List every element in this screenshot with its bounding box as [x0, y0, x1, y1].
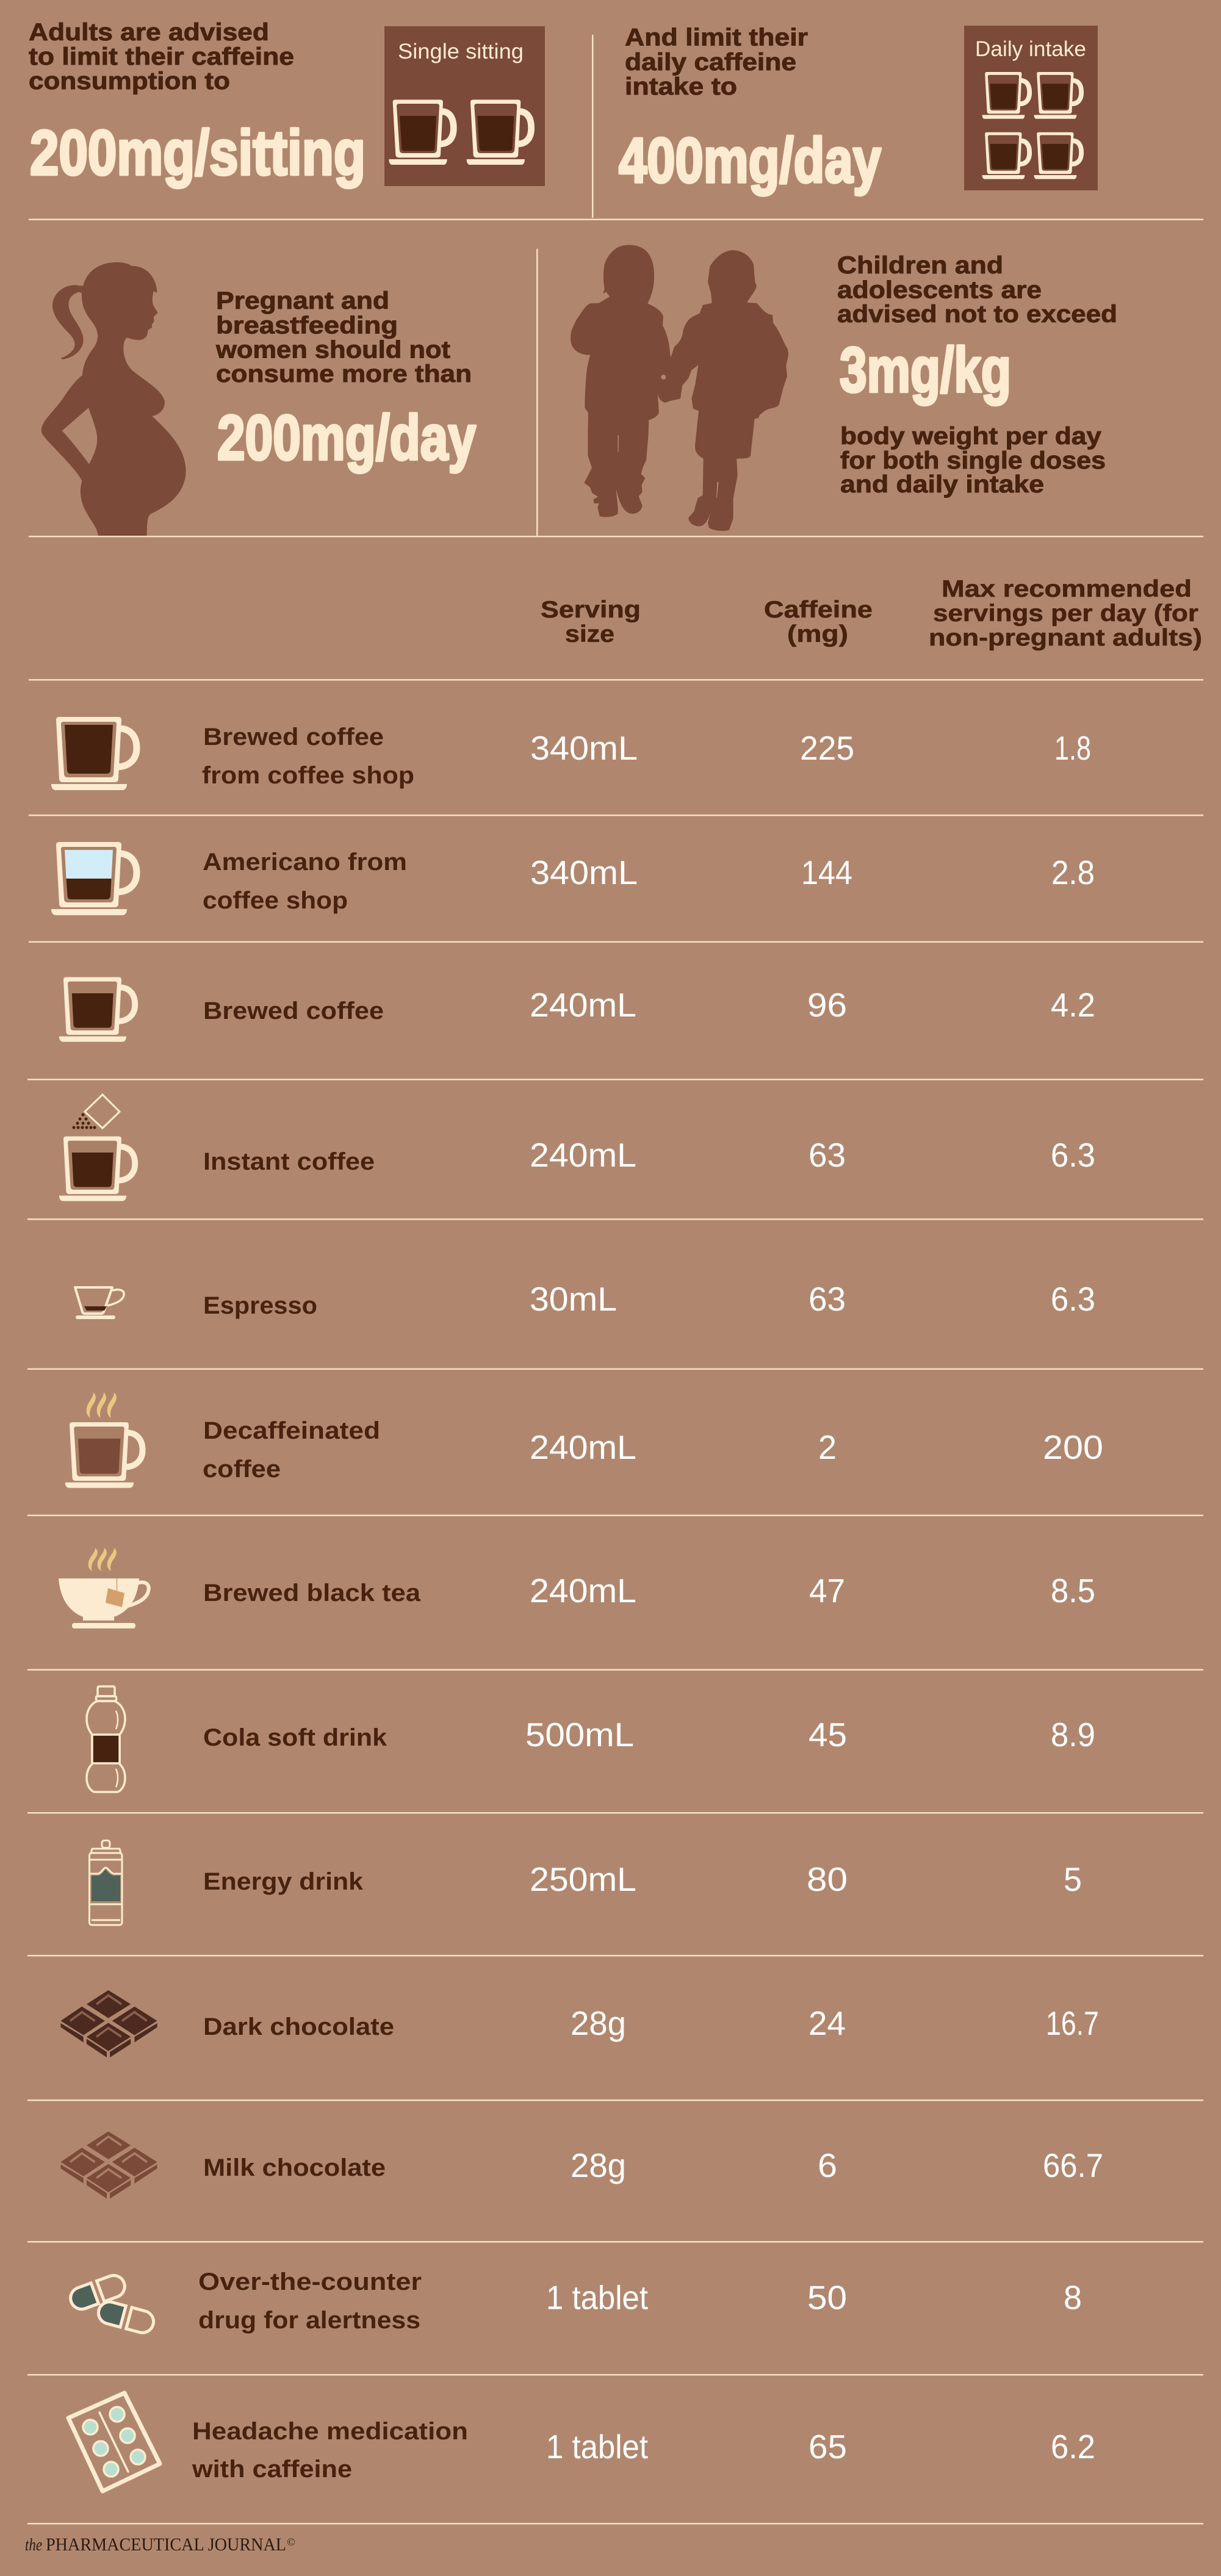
values: 24 [809, 2004, 846, 2042]
divider: horizontal [29, 218, 1203, 220]
label: Over-the-counter [198, 2268, 422, 2295]
icon: decaf mug with steam [65, 1392, 143, 1488]
column heading: max recommended servings: servings per day (for [933, 600, 1198, 627]
label: coffee shop [203, 887, 348, 914]
values [571, 2004, 1099, 2042]
values: 240mL [530, 1428, 636, 1466]
values [525, 1716, 1095, 1754]
text: children advice: Children and [837, 252, 1003, 279]
values: 63 [809, 1280, 846, 1318]
text: daily advice: And limit their [625, 24, 808, 51]
label: Brewed black tea [203, 1580, 421, 1606]
label: Espresso [203, 1292, 317, 1319]
text: daily advice [625, 24, 808, 100]
values: 5 [1064, 1860, 1082, 1898]
label: Energy drink [203, 1868, 364, 1895]
icon: blister pack [68, 2393, 160, 2491]
values [546, 2278, 1082, 2316]
icon: children silhouette [571, 245, 788, 531]
values [530, 854, 1095, 891]
icon: americano mug [51, 842, 137, 915]
label: Brewed coffee [203, 998, 384, 1024]
text: pregnancy advice: breastfeeding [216, 312, 398, 339]
values: 2.8 [1051, 854, 1095, 891]
text: children advice: adolescents are [837, 277, 1042, 304]
text: pregnancy advice [215, 287, 472, 387]
table rules [27, 536, 1203, 2525]
column heading: caffeine: (mg) [787, 621, 848, 647]
values: 66.7 [1043, 2146, 1103, 2184]
text: pregnancy advice: consume more than [216, 361, 472, 387]
values [546, 2428, 1095, 2466]
values: 1.8 [1054, 729, 1091, 767]
label: coffee [203, 1456, 281, 1483]
label: from coffee shop [202, 762, 414, 789]
label: Brewed coffee [203, 724, 384, 750]
values [530, 986, 1095, 1024]
icon: tea cup with tea bag [59, 1548, 149, 1628]
values [571, 2146, 1103, 2184]
values: 250mL [530, 1860, 636, 1898]
values: 4.2 [1051, 986, 1095, 1024]
values: 1 tablet [546, 2278, 648, 2316]
row: brewed coffee [59, 977, 1095, 1042]
text: pregnancy advice: women should not [215, 337, 450, 364]
box: daily intake [964, 26, 1098, 190]
values: 225 [800, 729, 854, 767]
icon: mug two [467, 99, 531, 165]
label: drug for alertness [198, 2307, 420, 2334]
row: brewed coffee from coffee shop [51, 717, 1091, 790]
row: over-the-counter drug [68, 2268, 1082, 2335]
values: 47 [809, 1572, 845, 1610]
values: 45 [809, 1716, 847, 1754]
big number: 3mg/kg: 3mg/kg [840, 335, 1011, 406]
label: Cola soft drink [203, 1724, 387, 1751]
row: dark chocolate [60, 1990, 1099, 2057]
values: 8 [1064, 2278, 1082, 2316]
values: 28g [571, 2146, 626, 2184]
values: 6 [818, 2146, 837, 2184]
icon: coffee mug [51, 717, 137, 790]
text: body weight note [840, 423, 1106, 498]
big number: 200mg/sitting: 200mg/sitting [30, 118, 366, 189]
row: energy drink [89, 1840, 1082, 1925]
icon: instant coffee mug with sachet [59, 1095, 135, 1201]
label: Instant coffee [203, 1148, 375, 1175]
values: 240mL [530, 986, 636, 1024]
text: adults advice: to limit their caffeine [29, 43, 294, 70]
big number: 400mg/day: 400mg/day [619, 126, 881, 196]
values: 30mL [530, 1280, 617, 1318]
column heading: max recommended servings [929, 576, 1202, 651]
values: 144 [801, 854, 852, 891]
column heading: caffeine [764, 597, 873, 647]
text: adults advice [29, 19, 294, 95]
big number: 200mg/day: 200mg/day [217, 403, 476, 473]
text: body weight note: body weight per day [840, 423, 1102, 450]
values: 240mL [530, 1136, 636, 1174]
values [530, 1280, 1095, 1318]
label [203, 1417, 380, 1483]
label: Dark chocolate [203, 2013, 394, 2040]
icon: mug grid [982, 72, 1081, 179]
column heading: max recommended servings: Max recommended [942, 576, 1192, 602]
values: 96 [807, 986, 847, 1024]
values [530, 729, 1091, 767]
values: 2 [818, 1428, 837, 1466]
panel: children [571, 245, 1117, 531]
footer: publisher logo: © [287, 2536, 295, 2548]
values: 80 [807, 1860, 848, 1898]
values: 63 [809, 1136, 846, 1174]
label: Milk chocolate [203, 2154, 386, 2181]
label: with caffeine [192, 2456, 352, 2483]
box: single sitting: Single sitting [398, 40, 524, 63]
values: 240mL [530, 1572, 636, 1610]
text: daily advice: daily caffeine [625, 49, 796, 76]
values: 16.7 [1046, 2004, 1099, 2042]
row: milk chocolate [60, 2131, 1103, 2199]
row: espresso [75, 1280, 1095, 1319]
row: cola soft drink [87, 1686, 1095, 1792]
label [192, 2418, 468, 2483]
footer: publisher logo: PHARMACEUTICAL JOURNAL [46, 2535, 286, 2555]
label: Decaffeinated [203, 1417, 380, 1444]
icon: energy drink can [89, 1840, 122, 1925]
values [530, 1428, 1103, 1466]
values: 500mL [525, 1716, 634, 1754]
row: decaffeinated coffee [65, 1392, 1103, 1488]
icon: dark chocolate [60, 1990, 157, 2057]
icon: mug one [389, 99, 453, 165]
text: body weight note: and daily intake [840, 471, 1044, 498]
text: body weight note: for both single doses [840, 447, 1106, 474]
values [530, 1572, 1095, 1610]
text: adults advice: Adults are advised [29, 19, 269, 46]
values [530, 1860, 1082, 1898]
values: 8.9 [1051, 1716, 1095, 1754]
text: daily advice: intake to [625, 73, 737, 100]
icon: milk chocolate [60, 2131, 157, 2199]
row: instant coffee [59, 1095, 1095, 1201]
values: 50 [807, 2278, 847, 2316]
box: single sitting [384, 26, 545, 186]
panel: adult daily limit [619, 24, 1098, 196]
row: headache medication [68, 2393, 1095, 2491]
text: children advice: advised not to exceed [837, 301, 1117, 328]
values: 8.5 [1051, 1572, 1095, 1610]
box: daily intake: Daily intake [975, 37, 1086, 61]
values [530, 1136, 1095, 1174]
text: pregnancy advice: Pregnant and [216, 287, 389, 314]
label: Headache medication [192, 2418, 468, 2445]
icon: cola bottle [87, 1686, 125, 1792]
panel: pregnant women [41, 262, 476, 536]
label [202, 724, 414, 789]
values: 6.3 [1051, 1136, 1095, 1174]
values: 28g [571, 2004, 626, 2042]
values: 200 [1043, 1428, 1103, 1466]
values: 340mL [530, 729, 638, 767]
values: 6.3 [1051, 1280, 1095, 1318]
row: brewed black tea [59, 1548, 1095, 1628]
values: 6.2 [1051, 2428, 1095, 2466]
values: 1 tablet [546, 2428, 648, 2466]
table header [541, 576, 1202, 651]
row: americano [51, 842, 1095, 915]
icon: espresso cup [75, 1287, 124, 1319]
icon: capsules [68, 2272, 156, 2335]
footer: publisher logo: the [25, 2536, 42, 2555]
column heading: serving size: size [565, 621, 614, 647]
text: children advice [837, 252, 1117, 328]
label [203, 849, 407, 914]
icon: pregnant woman silhouette [41, 262, 186, 536]
values: 65 [809, 2428, 847, 2466]
column heading: max recommended servings: non-pregnant adults) [929, 625, 1202, 651]
panel: adult single sitting limit [29, 19, 545, 189]
icon: coffee mug [59, 977, 135, 1042]
divider: vertical middle [536, 249, 538, 536]
column heading: caffeine: Caffeine [764, 597, 873, 623]
divider: vertical top [592, 35, 593, 218]
values: 340mL [530, 854, 638, 891]
label: Americano from [203, 849, 407, 876]
label [198, 2268, 422, 2334]
column heading: serving size [541, 597, 641, 647]
text: adults advice: consumption to [29, 68, 230, 95]
column heading: serving size: Serving [541, 597, 641, 623]
